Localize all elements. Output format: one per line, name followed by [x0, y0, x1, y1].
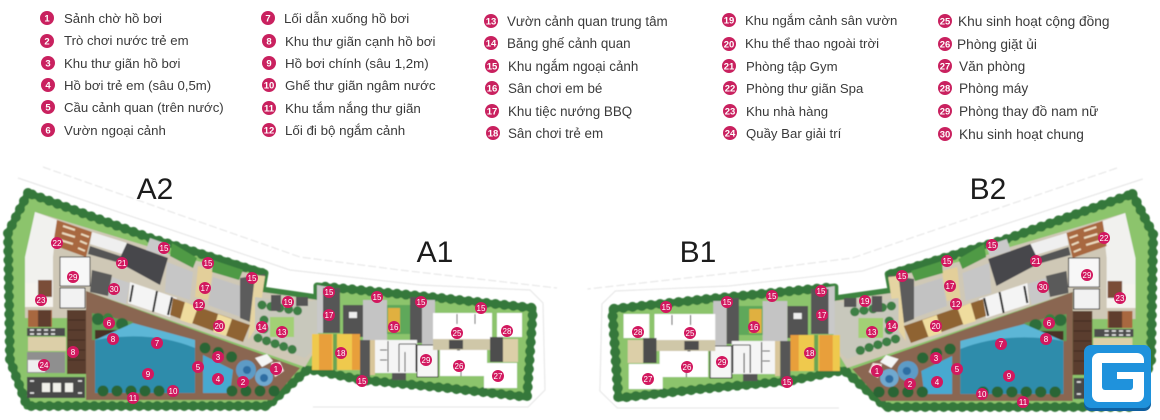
- legend column 2: 12: [264, 126, 274, 136]
- numbered markers: B2: 14: [888, 322, 897, 331]
- legend column 3: 18: [488, 128, 498, 140]
- numbered markers: A1: 15: [477, 304, 486, 313]
- numbered markers: A2: 15: [160, 244, 169, 253]
- legend column 4: Quầy Bar giải trí: [746, 126, 842, 141]
- A1 BBQ and gardens: [317, 285, 340, 333]
- numbered markers: B1: 15: [783, 378, 792, 387]
- numbered markers: A2: 8: [111, 335, 116, 344]
- numbered markers: A2: 15: [204, 259, 213, 268]
- legend column 2: Ghế thư giãn ngâm nước: [285, 78, 436, 93]
- legend column 5: 29: [940, 106, 950, 118]
- numbered markers: A1: 17: [325, 311, 334, 320]
- numbered markers: B2: 3: [934, 354, 939, 363]
- numbered markers: B1: 27: [644, 375, 653, 384]
- numbered markers: A2: 29: [69, 273, 78, 282]
- tower labels: [137, 173, 1006, 269]
- numbered markers: A2: 9: [146, 370, 151, 379]
- legend column 1: Cầu cảnh quan (trên nước): [64, 100, 224, 115]
- legend column 1: Vườn ngoại cảnh: [64, 123, 166, 138]
- numbered markers: A2: 19: [284, 298, 293, 307]
- legend column 1: 4: [45, 80, 51, 92]
- numbered markers: B1: [632, 285, 828, 388]
- numbered markers: A2: 20: [215, 322, 224, 331]
- legend column 5: 25: [940, 16, 951, 28]
- numbered markers: A2: 1: [274, 365, 279, 374]
- numbered markers: A2: 12: [195, 301, 204, 310]
- legend column 5: 28: [940, 84, 950, 94]
- legend column 2: Khu tắm nắng thư giãn: [285, 101, 421, 116]
- legend column 4: 20: [724, 40, 734, 50]
- numbered markers: A2: 15: [248, 274, 257, 283]
- numbered markers: A2: 24: [40, 361, 49, 370]
- legend column 4: Phòng thư giãn Spa: [746, 81, 864, 96]
- numbered markers: B2: 2: [908, 380, 913, 389]
- legend column 1: 1: [44, 14, 50, 24]
- sport court band: [170, 298, 250, 342]
- numbered markers: A2: 7: [155, 339, 160, 348]
- legend column 5: Văn phòng: [959, 59, 1025, 74]
- numbered markers: B1: 16: [750, 323, 759, 332]
- legend column 2: 7: [265, 14, 271, 24]
- site plan: towers A1 and A2: [8, 167, 557, 407]
- legend column 4: 19: [724, 16, 734, 26]
- numbered markers: A1: 16: [390, 323, 399, 332]
- legend column 2: Khu thư giãn cạnh hồ bơi: [285, 34, 436, 49]
- central garden: [255, 297, 318, 358]
- numbered markers: A2: 3: [216, 353, 221, 362]
- legend column 1: Sảnh chờ hồ bơi: [64, 11, 162, 26]
- numbered markers: B2: 11: [1019, 398, 1028, 407]
- children's pool: [203, 355, 233, 393]
- numbered markers: B2: 21: [1032, 257, 1041, 266]
- numbered markers: A1: 27: [494, 372, 503, 381]
- numbered markers: B2: 17: [946, 282, 955, 291]
- spa block: [25, 212, 57, 283]
- legend column 1: 3: [45, 58, 51, 70]
- numbered markers: A1: 25: [453, 329, 462, 338]
- legend column 3: [484, 14, 668, 141]
- numbered markers: B2: 9: [1007, 372, 1012, 381]
- legend column 1: Trò chơi nước trẻ em: [64, 33, 189, 48]
- numbered markers: B2: 20: [932, 322, 941, 331]
- site plan: towers B1 and B2 (mirrored): [588, 168, 1153, 408]
- numbered markers: B1: 15: [662, 303, 671, 312]
- legend column 1: Khu thư giãn hồ bơi: [64, 56, 181, 71]
- numbered markers: A2: 14: [258, 323, 267, 332]
- legend column 4: [722, 13, 897, 141]
- numbered markers: A2: 10: [169, 387, 178, 396]
- legend column 3: Sân chơi em bé: [508, 81, 602, 96]
- legend column 5: 27: [940, 62, 950, 72]
- kids' playground: [312, 334, 360, 370]
- legend column 3: Khu tiệc nướng BBQ: [508, 104, 632, 119]
- numbered markers: A2: 11: [129, 394, 138, 403]
- numbered markers: A1: 15: [358, 377, 367, 386]
- legend: [40, 11, 1109, 142]
- legend column 3: 16: [487, 84, 497, 94]
- legend column 2: 8: [266, 36, 272, 48]
- numbered markers: B2: 15: [988, 241, 997, 250]
- numbered markers: A2: 17: [201, 284, 210, 293]
- legend column 2: Lối dẫn xuống hồ bơi: [284, 11, 409, 26]
- numbered markers: B1: 15: [768, 292, 777, 301]
- legend column 2: 9: [266, 58, 272, 70]
- numbered markers: B2: 6: [1047, 319, 1052, 328]
- main pool: [95, 323, 195, 393]
- legend column 1: 5: [45, 102, 51, 114]
- legend column 5: 26: [940, 40, 950, 50]
- label A1: A1: [417, 236, 453, 269]
- numbered markers: B1: 28: [634, 328, 643, 337]
- legend column 2: Hồ bơi chính (sâu 1,2m): [285, 56, 429, 71]
- numbered markers: B1: 15: [723, 298, 732, 307]
- legend column 5: Phòng thay đồ nam nữ: [959, 104, 1098, 119]
- label A2: A2: [137, 173, 173, 206]
- numbered markers: A2: 23: [37, 296, 46, 305]
- numbered markers: B2: 19: [861, 297, 870, 306]
- numbered markers: A1: 15: [417, 298, 426, 307]
- numbered markers: A1: 28: [503, 327, 512, 336]
- legend column 4: 23: [725, 106, 735, 118]
- numbered markers: B2: 4: [935, 378, 940, 387]
- legend column 3: 15: [487, 62, 498, 72]
- changing rooms 29: [60, 257, 90, 286]
- legend column 5: Khu sinh hoạt cộng đồng: [958, 14, 1109, 29]
- numbered markers: B2: 13: [868, 328, 877, 337]
- gym block: [90, 232, 127, 254]
- numbered markers: A1: 15: [373, 293, 382, 302]
- numbered markers: B2: 30: [1039, 283, 1048, 292]
- numbered markers: A1: 18: [337, 349, 346, 358]
- water play: [236, 360, 256, 380]
- legend column 5: Phòng máy: [959, 81, 1028, 96]
- legend column 5: 30: [940, 130, 950, 140]
- timber deck: [86, 291, 300, 400]
- legend column 4: Phòng tập Gym: [746, 59, 838, 74]
- restaurant block: [25, 283, 53, 307]
- legend column 4: 21: [724, 62, 735, 72]
- legend column 2: 10: [264, 80, 274, 92]
- legend column 3: Vườn cảnh quan trung tâm: [507, 14, 668, 29]
- numbered markers: A2: 5: [196, 363, 201, 372]
- legend column 3: 14: [486, 38, 497, 50]
- upper garden by pool: [92, 313, 133, 340]
- legend column 1: 6: [45, 126, 51, 136]
- numbered markers: B1: 29: [718, 358, 727, 367]
- legend column 2: 11: [264, 104, 275, 114]
- numbered markers: B2: 23: [1116, 294, 1125, 303]
- legend column 4: Khu ngắm cảnh sân vườn: [745, 13, 897, 28]
- A1 service rooms: [375, 340, 417, 373]
- label B1: B1: [680, 236, 716, 269]
- legend column 1: 2: [44, 36, 50, 48]
- numbered markers: B2: 5: [955, 365, 960, 374]
- numbered markers: B2: 29: [1083, 271, 1092, 280]
- A2 building base: [25, 212, 318, 367]
- green planters: [170, 243, 197, 268]
- legend column 3: 17: [487, 106, 497, 118]
- legend column 3: 13: [486, 16, 496, 28]
- legend column 3: Sân chơi trẻ em: [508, 126, 603, 141]
- numbered markers: B1: 17: [818, 311, 827, 320]
- numbered markers: B1: 25: [686, 329, 695, 338]
- garden perimeter: [8, 193, 533, 406]
- numbered markers: A2: 8: [71, 348, 76, 357]
- lobby: [255, 354, 273, 367]
- community halls: [433, 313, 492, 340]
- numbered markers: B2: 15: [943, 257, 952, 266]
- numbered markers: A2: 21: [118, 259, 127, 268]
- numbered markers: B2: 8: [1044, 335, 1049, 344]
- legend column 4: Khu thể thao ngoài trời: [745, 36, 879, 51]
- legend column 1: [40, 11, 224, 138]
- numbered markers: A2: 2: [241, 378, 246, 387]
- legend column 1: Hồ bơi trẻ em (sâu 0,5m): [64, 78, 211, 93]
- numbered markers: A1: 29: [422, 356, 431, 365]
- legend column 5: Phòng giặt ủi: [957, 37, 1037, 52]
- legend column 3: Khu ngắm ngoại cảnh: [508, 59, 638, 74]
- numbered markers: B2: 12: [952, 300, 961, 309]
- numbered markers: A2: 13: [278, 328, 287, 337]
- numbered markers: A1: 26: [455, 362, 464, 371]
- legend column 4: 24: [725, 128, 736, 140]
- numbered markers: A1: [323, 286, 513, 387]
- legend column 3: Băng ghế cảnh quan: [507, 36, 631, 51]
- numbered markers: A1: 15: [325, 288, 334, 297]
- bar block: [27, 328, 65, 336]
- legend column 4: Khu nhà hàng: [746, 104, 828, 119]
- numbered markers: B2: 7: [999, 340, 1004, 349]
- numbered markers: B1: 18: [806, 349, 815, 358]
- numbered markers: B1: 15: [817, 287, 826, 296]
- legend column 2: Lối đi bộ ngắm cảnh: [285, 123, 405, 138]
- label B2: B2: [970, 173, 1006, 206]
- numbered markers: A2: 4: [216, 375, 221, 384]
- numbered markers: A2: 6: [107, 319, 112, 328]
- legend column 5: Khu sinh hoạt chung: [959, 127, 1084, 142]
- palm trees: [103, 348, 285, 391]
- numbered markers: B2: 1: [875, 367, 880, 376]
- legend column 4: 22: [725, 84, 735, 94]
- numbered markers: B2: 10: [978, 390, 987, 399]
- numbered markers: A2: [35, 237, 294, 404]
- legend column 5: [938, 14, 1109, 142]
- legend column 2: [261, 11, 436, 138]
- numbered markers: A2: 22: [53, 239, 62, 248]
- numbered markers: B2: 15: [898, 272, 907, 281]
- numbered markers: B1: 26: [683, 363, 692, 372]
- logo: G badge: [1084, 345, 1151, 411]
- numbered markers: B2: [859, 232, 1126, 408]
- numbered markers: A2: 30: [110, 285, 119, 294]
- numbered markers: B2: 22: [1100, 234, 1109, 243]
